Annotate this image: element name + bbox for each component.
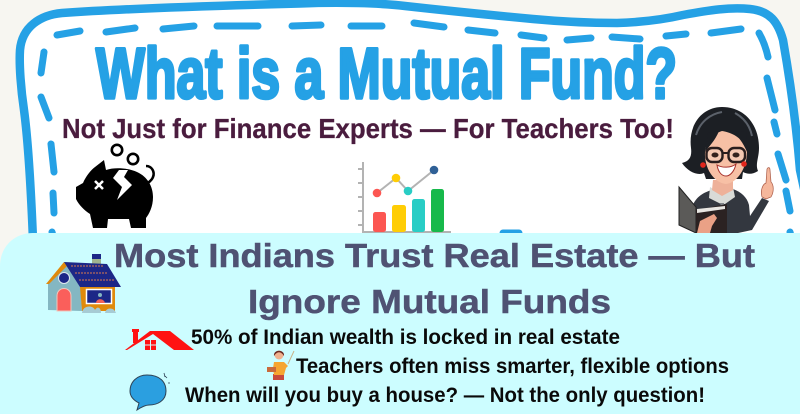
text: buy a house question: When will you buy a house? — Not the only question! — [185, 384, 705, 407]
subtitle: Not Just for Finance Experts — For Teachers Too! — [62, 113, 674, 144]
chart: growth bars and line — [358, 162, 451, 232]
panel: real estate — [0, 233, 800, 414]
icon: speech bubble — [130, 373, 170, 410]
icon: colourful house — [46, 254, 121, 313]
heading: real estate vs mutual funds — [114, 237, 755, 320]
icon: broken piggy bank — [76, 145, 154, 228]
heading: real estate vs mutual funds: Ignore Mutual Funds — [248, 283, 611, 320]
icon: small teacher — [267, 350, 294, 380]
icon: teacher character — [679, 107, 773, 233]
heading: real estate vs mutual funds: Most Indians Trust Real Estate — But — [114, 237, 755, 274]
text: real estate wealth: 50% of Indian wealth is locked in real estate — [191, 326, 620, 349]
text: teachers miss options: Teachers often miss smarter, flexible options — [296, 355, 729, 378]
panel: stitched white card — [20, 3, 800, 240]
icon: red roof — [125, 329, 194, 350]
